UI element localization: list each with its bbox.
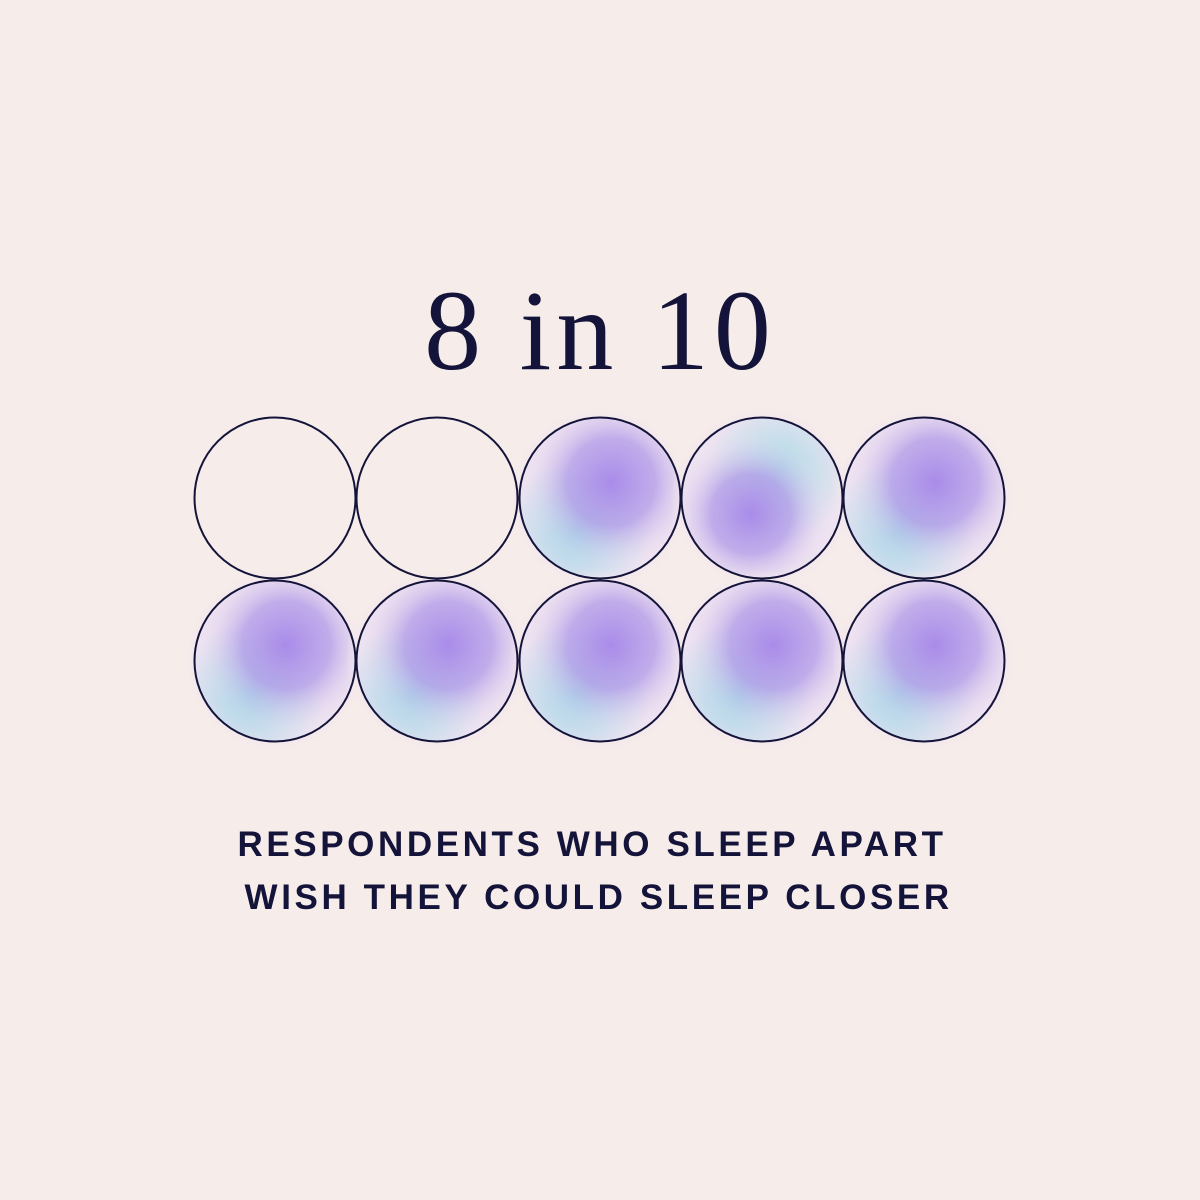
caption: RESPONDENTS WHO SLEEP APART: [237, 825, 947, 864]
title: 8 in 10: [424, 267, 776, 394]
caption: [237, 825, 953, 917]
filled circles: [183, 406, 1016, 753]
circle outlines: [194, 418, 1004, 742]
caption: WISH THEY COULD SLEEP CLOSER: [245, 878, 953, 917]
